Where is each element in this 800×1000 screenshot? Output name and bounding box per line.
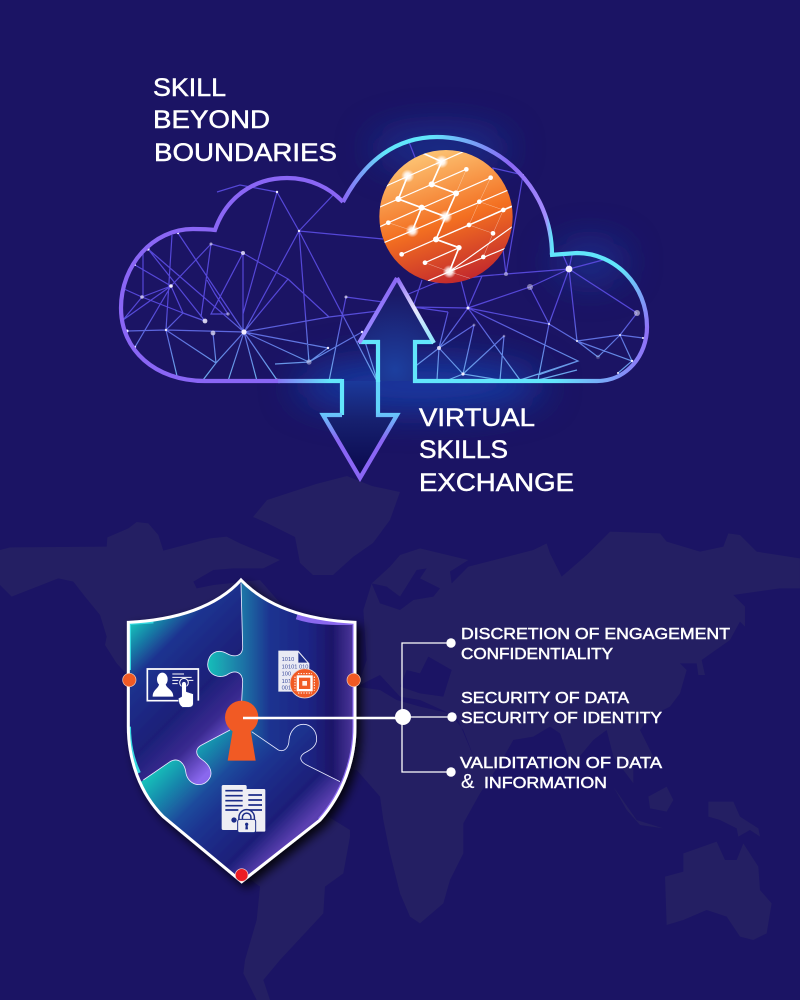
- icon: binary document with chip: 100: [282, 672, 291, 678]
- text block: security: SECURITY OF DATA: [461, 690, 629, 707]
- text block: discretion and confidentiality: DISCRETION OF ENGAGEMENT: [461, 626, 730, 643]
- icon: binary document with chip: 10101 010: [282, 664, 308, 670]
- marker: left: [123, 673, 136, 687]
- heading: skill beyond boundaries: SKILL: [153, 74, 226, 102]
- world map background: [0, 476, 800, 1000]
- text block: validation: VALIDITATION OF DATA: [460, 755, 662, 772]
- text block: validation: INFORMATION: [484, 775, 607, 792]
- marker: bottom: [235, 869, 248, 881]
- cloud glow: [295, 128, 626, 411]
- text block: validation: &: [461, 771, 475, 793]
- network nodes: [122, 141, 644, 382]
- icon: binary document with chip: 0010: [282, 686, 294, 692]
- heading: skill beyond boundaries: BEYOND: [153, 106, 270, 134]
- icon: binary document with chip: [278, 651, 319, 698]
- network lines: [123, 142, 643, 383]
- orange network globe: [377, 150, 513, 283]
- heading: virtual skills exchange: VIRTUAL: [419, 404, 535, 432]
- up and down arrow fills: [323, 278, 433, 478]
- heading: skill beyond boundaries: [153, 74, 337, 167]
- keyhole: [225, 701, 258, 761]
- marker: right: [347, 673, 360, 687]
- heading: virtual skills exchange: EXCHANGE: [419, 469, 574, 497]
- heading: virtual skills exchange: SKILLS: [419, 436, 508, 464]
- heading: virtual skills exchange: [419, 404, 574, 497]
- connector lines: [243, 638, 457, 777]
- icon: binary document with chip: 101: [282, 679, 291, 685]
- icon: identity card: [147, 669, 198, 707]
- heading: skill beyond boundaries: BOUNDARIES: [154, 139, 337, 167]
- shield icons and markers: [123, 651, 360, 881]
- text block: discretion and confidentiality: [461, 626, 730, 663]
- text block: validation: [460, 755, 662, 793]
- text block: security: SECURITY OF IDENTITY: [461, 710, 662, 727]
- text block: security: [461, 690, 662, 727]
- shield: [126, 578, 368, 892]
- cloud outline with arrows: [121, 137, 647, 478]
- shield puzzle pieces: [129, 582, 365, 888]
- text block: discretion and confidentiality: CONFIDENTIALITY: [461, 646, 613, 663]
- icon: locked document: [222, 785, 265, 833]
- icon: binary document with chip: 1010: [282, 657, 294, 663]
